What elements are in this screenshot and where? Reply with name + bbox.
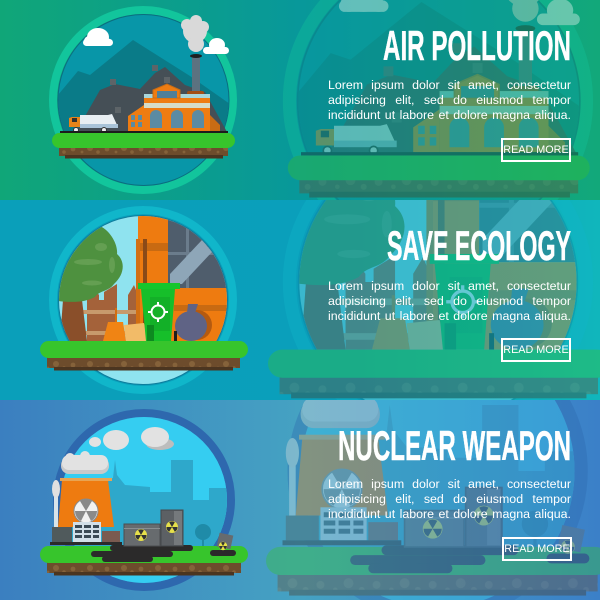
- truck: [69, 114, 118, 132]
- fence: [80, 284, 138, 341]
- body text: incididunt ut labore et dolore magna aliqua.: [328, 507, 571, 521]
- factory building: [128, 84, 220, 131]
- radioactive container: [124, 524, 160, 546]
- body text: adipisicing elit, sed do eiusmod tempor: [328, 93, 571, 107]
- chimney: [187, 54, 204, 95]
- radioactive barrel: [161, 510, 183, 546]
- coal bags: [110, 65, 170, 113]
- body text: Lorem ipsum dolor sit amet, consectetur: [328, 279, 571, 293]
- body text: [328, 279, 571, 323]
- oil spill: [50, 542, 236, 562]
- circle ring and sky: [53, 10, 233, 190]
- read more button: READ MORE: [503, 344, 569, 356]
- tipped barrel: [217, 533, 233, 550]
- body text: adipisicing elit, sed do eiusmod tempor: [328, 294, 571, 308]
- green recycling bin: [138, 283, 180, 341]
- garbage bag: [174, 304, 212, 341]
- body text: [328, 78, 571, 122]
- smoke clouds: [61, 427, 174, 474]
- body text: adipisicing elit, sed do eiusmod tempor: [328, 492, 571, 506]
- city silhouette: [60, 460, 230, 546]
- circle ring and sky: [53, 210, 233, 390]
- illustration: factory scene: [52, 10, 235, 190]
- platform: [52, 131, 235, 158]
- read more button: READ MORE: [503, 144, 569, 156]
- illustration: nuclear plant scene: [40, 413, 248, 587]
- small chimney and smoke: [52, 480, 60, 527]
- read more button: [501, 338, 571, 362]
- banner background: [0, 200, 600, 400]
- body text: Lorem ipsum dolor sit amet, consectetur: [328, 477, 571, 491]
- circle ring and sky: [57, 413, 231, 587]
- enlarged faded trash illustration: [268, 134, 600, 431]
- broom and dustpan: [103, 239, 148, 341]
- panel: save ecology banner: [0, 200, 600, 400]
- body text: incididunt ut labore et dolore magna aliqua.: [328, 108, 571, 122]
- panel: nuclear weapon banner: [0, 400, 600, 600]
- plant buildings: [52, 522, 120, 542]
- cooling tower: [58, 478, 114, 527]
- banner background: [0, 400, 600, 600]
- read more button: [502, 537, 572, 561]
- clouds: [83, 28, 229, 54]
- panel: air pollution banner: [0, 0, 600, 200]
- smoke: [181, 15, 209, 52]
- building wall and window: [138, 210, 230, 341]
- enlarged faded factory illustration: [288, 0, 590, 250]
- body text: [328, 477, 571, 521]
- banner background: [0, 0, 600, 200]
- coal hill: [76, 67, 227, 132]
- enlarged faded nuclear illustration: [266, 327, 600, 600]
- read more button: [501, 138, 571, 162]
- body text: incididunt ut labore et dolore magna aliqua.: [328, 309, 571, 323]
- body text: Lorem ipsum dolor sit amet, consectetur: [328, 78, 571, 92]
- tree: [195, 524, 211, 546]
- read more button: READ MORE: [504, 543, 570, 555]
- mountains: [58, 40, 230, 133]
- platform: [40, 341, 248, 370]
- illustration: trash scene: [40, 210, 248, 390]
- tree: [50, 226, 123, 341]
- platform: [40, 546, 248, 576]
